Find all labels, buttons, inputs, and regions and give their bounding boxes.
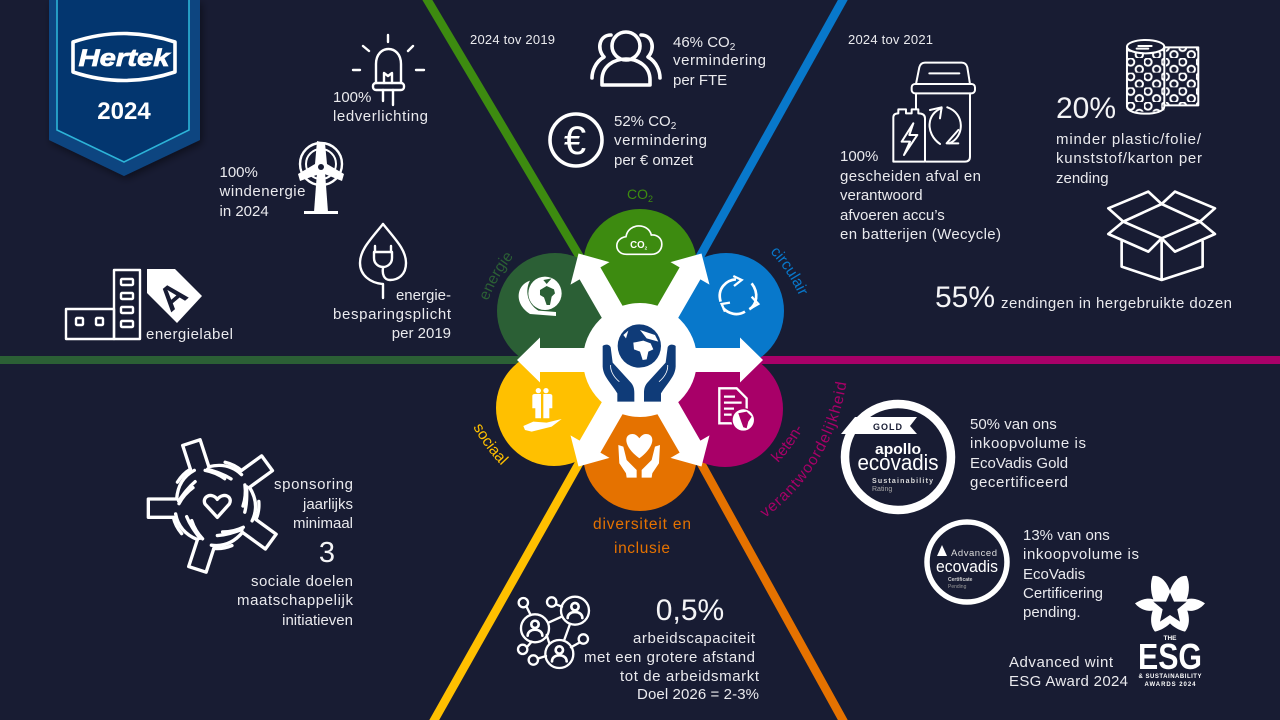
text: 0,5% arbeidscapaciteit: 0,5% [656,594,724,627]
text: ESG award [1009,654,1128,690]
text: 13% inkoopvolume: pending. [1023,604,1081,621]
icon: people [592,32,660,85]
text: 13% inkoopvolume: EcoVadis [1023,566,1085,583]
text: windenergie [218,164,306,220]
text: 20% minder plastic [1056,92,1202,187]
text: 13% inkoopvolume: 13% van ons [1023,527,1110,544]
label: verantwoordelijkheid: verantwoordelijkheid [760,382,846,516]
icon: document globe [719,388,755,432]
logo: ESG awards: & SUSTAINABILITY [1138,674,1202,680]
badge: EcoVadis Advanced [927,522,1007,602]
text: 13% inkoopvolume [1023,527,1139,621]
icon: building with label A [66,269,202,339]
badge: EcoVadis Gold: ecovadis [858,450,938,475]
icon: building with label A: A [151,274,195,319]
label: sociaal: sociaal [474,424,509,465]
text: 2024 tov 2019: 2024 tov 2019 [470,32,555,47]
text: 55% zendingen [935,281,1232,314]
text: 46% CO2 per FTE [673,34,766,89]
text: 52% CO2 per euro: 2 [671,121,677,132]
icon: open box [1108,192,1215,280]
text: sponsoring: jaarlijks [302,496,353,513]
logo: ESG awards: THE [1164,635,1177,642]
label: diversiteit en inclusie: diversiteit en [593,516,691,533]
badge: EcoVadis Gold: Sustainability [872,478,933,485]
text: energiebesparingsplicht [333,287,452,342]
text: energiebesparingsplicht: energie- [396,287,451,304]
text: windenergie: 100% [220,164,258,181]
spoke line: ketenverantwoordelijkheid [755,356,1280,364]
text: sponsoring: sociale doelen [251,573,353,590]
icon: leaf globe [519,277,562,316]
badge: EcoVadis Gold [841,404,951,510]
badge: EcoVadis Advanced: ecovadis [936,557,998,576]
spoke line: energie [0,356,525,364]
text: ledverlichting [333,89,428,125]
icon: CO2 cloud [617,226,662,254]
text: 50% inkoopvolume: 50% van ons [970,416,1057,433]
text: ledverlichting: ledverlichting [333,108,428,125]
text: 20% minder plastic: zending [1056,170,1109,187]
icon: recycle [720,276,758,314]
spoke line: diversiteit [698,458,845,720]
icon: LED [353,35,424,105]
icon: people on hand [523,388,562,432]
label: keten: keten- [770,426,800,462]
text: windenergie: in 2024 [220,203,269,220]
text: gescheiden afval [840,148,1001,243]
label: CO2: CO [627,186,648,202]
text: 50% inkoopvolume [970,416,1086,491]
text: 2024 tov 2021: 2024 tov 2021 [848,32,933,47]
text: 55% zendingen: zendingen in hergebruikte dozen [1001,295,1232,312]
logo: Hertek [73,34,175,80]
year: 2024 [97,98,151,125]
flower diagram [496,209,784,511]
text: 50% inkoopvolume: inkoopvolume is [970,435,1086,452]
text: sponsoring: sponsoring [274,476,353,493]
icon: globe in hands [603,324,676,402]
text: 46% CO2 per FTE: per FTE [673,72,727,89]
icon: CO2 cloud: CO [630,240,645,251]
badge: EcoVadis Advanced: Certificate [948,577,973,583]
icon: heart in hands [618,434,660,478]
text: 52% CO2 per euro: 52% CO [614,113,671,130]
text: sponsoring: minimaal [293,515,353,532]
spoke line: circulair [698,0,845,260]
text: gescheiden afval: afvoeren accu’s [840,207,945,224]
badge: EcoVadis Advanced: Pending [948,584,967,590]
petal: sociaal [496,350,612,466]
petal: CO2 [583,209,697,323]
icon: euro: € [564,119,586,163]
text: energiebesparingsplicht: besparingsplicht [333,306,452,323]
spoke line: sociaal [432,458,582,720]
text: ESG award: Advanced wint [1009,654,1114,671]
text: 46% CO2 per FTE: 2 [730,42,736,53]
icon: waste bin with battery [893,63,975,162]
text: 55% zendingen: 55% [935,281,995,314]
text: 20% minder plastic: minder plastic/folie/ [1056,131,1202,148]
icon: CO2 cloud: 2 [645,246,648,251]
text: 46% CO2 per FTE: 46% CO [673,34,730,51]
spoke line: CO2 [425,0,584,264]
badge: EcoVadis Advanced: Advanced [951,548,997,559]
icon: euro [550,114,602,166]
text: 46% CO2 per FTE: vermindering [673,52,766,69]
text: energiebesparingsplicht: per 2019 [392,325,451,342]
text: 13% inkoopvolume: inkoopvolume is [1023,546,1139,563]
text: windenergie: windenergie [218,183,306,200]
logo: ESG awards [1135,576,1205,688]
text: ledverlichting: 100% [333,89,371,106]
icon: leaf plug [360,224,406,298]
text: ESG award: ESG Award 2024 [1009,673,1128,690]
text: gescheiden afval: verantwoord [840,187,923,204]
text: 52% CO2 per euro [614,113,707,169]
text: 20% minder plastic: kunststof/karton per [1056,150,1202,167]
icon: hands circle with heart [148,431,289,579]
center disc [583,303,697,417]
text: sponsoring: 3 [319,537,335,569]
label: diversiteit en inclusie [593,516,691,557]
icon: network of people [518,597,589,668]
label: energie: energie [482,253,512,300]
badge: EcoVadis Gold: GOLD [873,422,903,432]
text: 13% inkoopvolume: Certificering [1023,585,1103,602]
text: 0,5% arbeidscapaciteit: met een grotere afstand [584,649,755,666]
logo: ESG awards: AWARDS 2024 [1144,682,1196,688]
icon: wind turbine [298,141,344,214]
petal: keten [667,351,783,467]
logo: ESG awards: ESG [1138,636,1202,677]
logo: Hertek: Hertek [78,45,171,72]
text: 50% inkoopvolume: EcoVadis Gold [970,455,1068,472]
badge: EcoVadis Gold: Rating [872,486,892,493]
text: 0,5% arbeidscapaciteit [584,594,760,703]
text: sponsoring: maatschappelijk [237,592,354,609]
text: 52% CO2 per euro: per € omzet [614,152,694,169]
text: gescheiden afval: 100% [840,148,878,165]
text: gescheiden afval: en batterijen (Wecycle) [840,226,1001,243]
badge: Hertek 2024 [49,0,200,176]
text: 0,5% arbeidscapaciteit: arbeidscapaciteit [633,630,756,647]
icon: bubble wrap roll [1127,40,1198,114]
label: diversiteit en inclusie: inclusie [614,540,670,557]
text: 50% inkoopvolume: gecertificeerd [970,474,1068,491]
arrows [517,242,763,478]
label: CO2: 2 [648,194,653,204]
petal: circulair [668,253,784,369]
badge: EcoVadis Gold: apollo [875,441,921,458]
text: 0,5% arbeidscapaciteit: Doel 2026 = 2-3% [637,686,759,703]
text: gescheiden afval: gescheiden afval en [840,168,981,185]
label: circulair: circulair [772,248,807,294]
text: sponsoring: initiatieven [282,612,353,629]
text: 0,5% arbeidscapaciteit: tot de arbeidsmarkt [620,668,760,685]
text: energielabel: energielabel [146,326,233,343]
petal: diversiteit [583,397,697,511]
text: 52% CO2 per euro: vermindering [614,132,707,149]
text: 20% minder plastic: 20% [1056,92,1116,125]
petal: energie [497,253,613,369]
text: sponsoring [237,476,354,629]
